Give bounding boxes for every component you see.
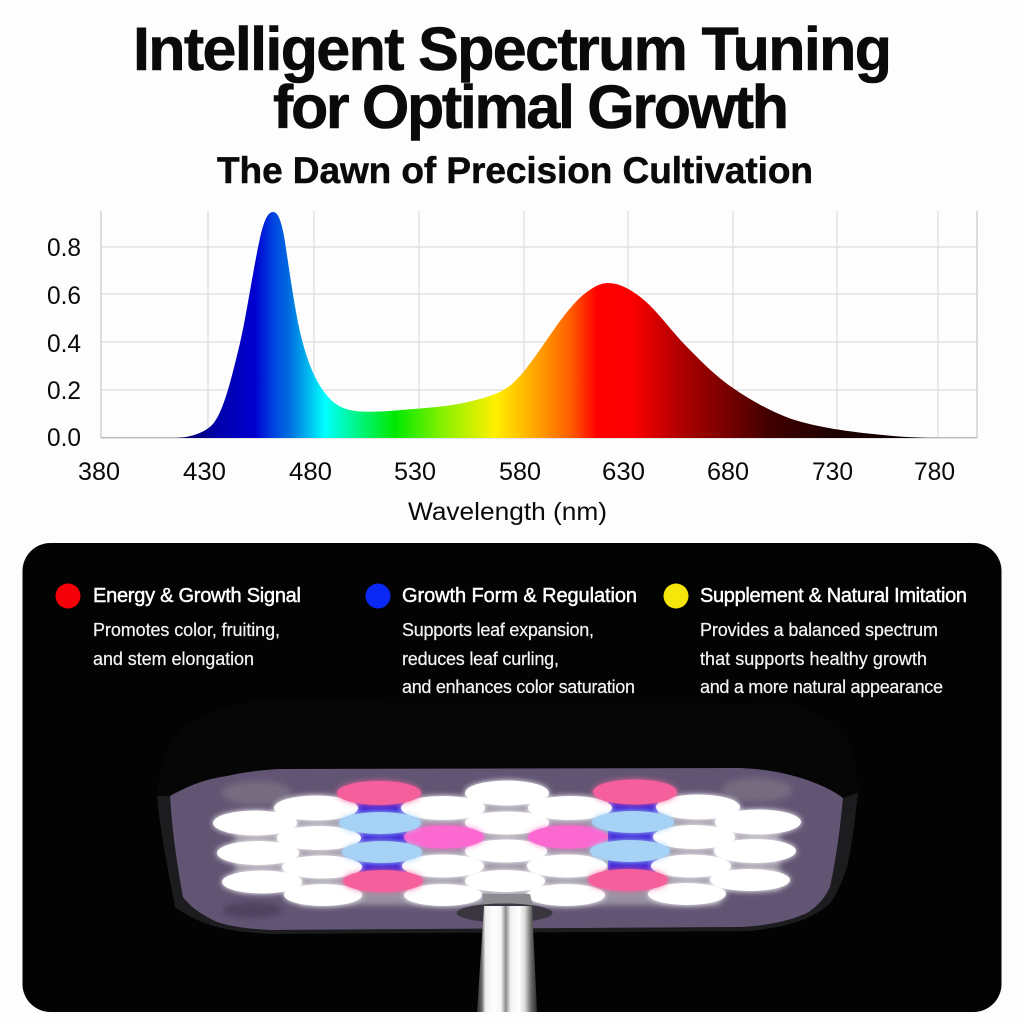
y axis labels bbox=[47, 234, 81, 452]
unlit LED patches bbox=[222, 778, 792, 918]
LED array bbox=[213, 778, 801, 918]
gap wash between LEDs bbox=[235, 800, 780, 905]
legend: energy and growth signal: Energy & Growth Signal bbox=[93, 585, 301, 607]
LED group: blue bbox=[339, 811, 674, 863]
legend: supplement and natural imitation: that supports healthy growth bbox=[700, 649, 927, 669]
legend: energy and growth signal bbox=[56, 584, 301, 669]
legend: growth form and regulation: and enhances color saturation bbox=[402, 677, 635, 697]
blue backing glow bbox=[355, 802, 658, 873]
legend: growth form and regulation: Supports leaf expansion, bbox=[402, 620, 594, 640]
grow light fixture bbox=[157, 768, 858, 1012]
x axis labels: 780 bbox=[914, 458, 955, 486]
LED group: magenta bbox=[404, 826, 608, 848]
x axis labels: 380 bbox=[78, 458, 120, 486]
y axis labels: 0.2 bbox=[47, 377, 81, 405]
x axis labels: 630 bbox=[602, 458, 645, 486]
x axis labels: 580 bbox=[499, 458, 541, 486]
x axis labels bbox=[78, 458, 955, 486]
legend: supplement and natural imitation bbox=[664, 584, 967, 697]
spectrum chart bbox=[47, 211, 977, 526]
x axis labels: 730 bbox=[812, 458, 853, 486]
lamp housing rim bbox=[157, 793, 858, 934]
legend: supplement and natural imitation: Provides a balanced spectrum bbox=[700, 620, 938, 640]
x axis labels: 530 bbox=[394, 458, 436, 486]
legend: energy and growth signal: and stem elongation bbox=[93, 649, 254, 669]
y axis labels: 0.0 bbox=[47, 424, 81, 452]
legend: growth form and regulation: Growth Form & Regulation bbox=[402, 585, 637, 607]
title bbox=[133, 15, 892, 141]
y axis labels: 0.6 bbox=[47, 282, 81, 310]
x axis labels: 480 bbox=[289, 458, 332, 486]
dark panel bbox=[22, 543, 1002, 1012]
LED group: pink bbox=[337, 780, 677, 892]
title: Intelligent Spectrum Tuning bbox=[133, 15, 892, 83]
subtitle: The Dawn of Precision Cultivation bbox=[217, 150, 813, 191]
y axis labels: 0.8 bbox=[47, 234, 81, 262]
legend: energy and growth signal: Promotes color, fruiting, bbox=[93, 620, 280, 640]
legend: supplement and natural imitation: Supplement & Natural Imitation bbox=[700, 585, 967, 607]
LED group: white bbox=[213, 780, 801, 906]
lamp housing bbox=[157, 702, 858, 934]
y axis labels: 0.4 bbox=[47, 330, 81, 358]
legend: growth form and regulation bbox=[366, 584, 637, 697]
legend: supplement and natural imitation: and a more natural appearance bbox=[700, 677, 943, 697]
x axis labels: 430 bbox=[183, 458, 226, 486]
lamp face bbox=[170, 768, 843, 930]
x axis labels: 680 bbox=[707, 458, 749, 486]
support pole bbox=[456, 894, 552, 1012]
legend: growth form and regulation: reduces leaf curling, bbox=[402, 649, 559, 669]
spectrum curve bbox=[173, 212, 935, 438]
title: for Optimal Growth bbox=[273, 73, 789, 141]
x axis title: Wavelength (nm) bbox=[408, 498, 607, 526]
